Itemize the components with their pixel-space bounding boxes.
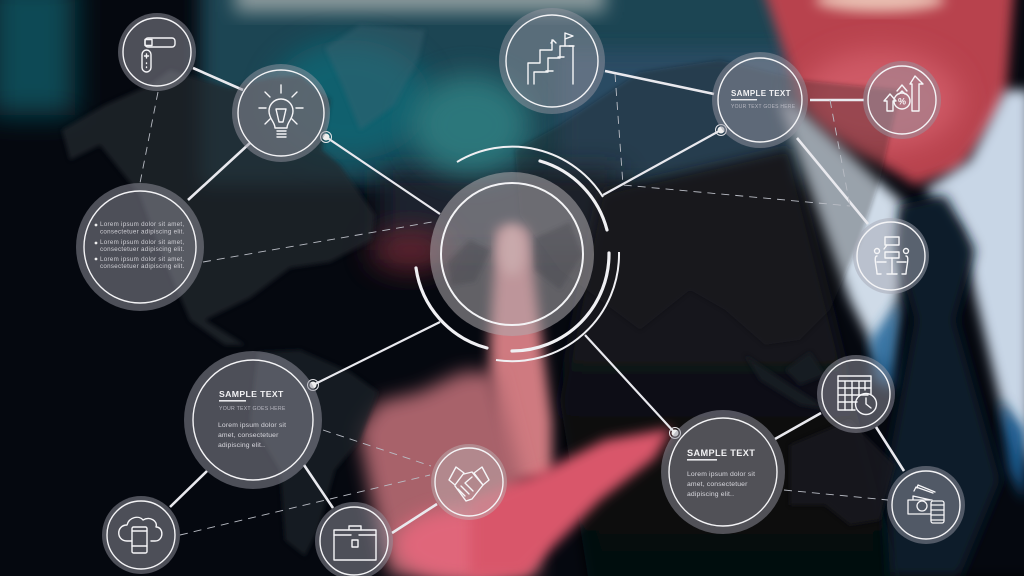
panel: sample text bottom right: amet, consectetuer (687, 481, 748, 488)
node: handshake icon (431, 444, 507, 520)
shirt collars (778, 100, 905, 370)
panel: sample text top right: YOUR TEXT GOES HERE (731, 104, 796, 110)
panel: sample text left (184, 351, 322, 489)
list text: Lorem ipsum dolor sit amet, (100, 239, 184, 246)
list text: consectetuer adipiscing elit. (100, 263, 185, 270)
world map silhouette (62, 25, 900, 556)
node: money icon (887, 466, 965, 544)
map: South America (250, 350, 378, 556)
node: usb icon (118, 13, 196, 91)
panel: sample text left: SAMPLE TEXT (219, 389, 284, 399)
map: Eurasia (515, 60, 900, 345)
suit (560, 148, 1024, 576)
panel: sample text left: adipiscing elit.. (218, 442, 265, 449)
node: briefcase icon (315, 502, 393, 576)
map: North America (62, 70, 375, 345)
list text (95, 221, 185, 270)
connector lines (140, 68, 904, 535)
panel: sample text bottom right: SAMPLE TEXT (687, 448, 755, 458)
dashed connectors (140, 92, 158, 183)
panel: sample text bottom right: adipiscing elit.. (687, 491, 734, 498)
panel: sample text left: Lorem ipsum dolor sit (218, 422, 286, 429)
list text: consectetuer adipiscing elit. (100, 228, 185, 236)
panel: sample text bottom right: Lorem ipsum dolor sit (687, 471, 755, 478)
index finger (490, 228, 552, 480)
node: light bulb icon (232, 64, 330, 162)
panel: sample text left: YOUR TEXT GOES HERE (219, 406, 286, 412)
node: percent growth icon: % (898, 96, 906, 106)
map: Australia (790, 420, 895, 525)
map: Europe and Africa on lens (448, 222, 582, 290)
node: meeting icon (853, 218, 929, 294)
solid connectors (193, 68, 243, 90)
panel: sample text bottom right (661, 410, 785, 534)
central target circle (416, 147, 619, 361)
panel: sample text top right (712, 52, 808, 148)
node: percent growth icon (863, 61, 941, 139)
node: calendar clock icon (817, 355, 895, 433)
node: cloud phone icon (102, 496, 180, 574)
outer arcs (457, 147, 603, 197)
node dots (308, 124, 726, 438)
list text: consectetuer adipiscing elit. (100, 246, 185, 253)
map: Greenland (325, 25, 425, 130)
map: Indonesia (745, 355, 830, 410)
node: stairs and flag icon (499, 8, 605, 114)
list text: Lorem ipsum dolor sit amet, (100, 256, 184, 263)
fist and knuckles (358, 372, 540, 576)
panel: sample text top right: SAMPLE TEXT (731, 89, 791, 98)
panel: sample text left: amet, consectetuer (218, 432, 279, 439)
face and neck (760, 0, 1015, 185)
node: bullet list panel (76, 183, 204, 311)
list text: Lorem ipsum dolor sit amet, (100, 221, 184, 228)
thumb (470, 428, 672, 576)
tie (885, 195, 1000, 576)
